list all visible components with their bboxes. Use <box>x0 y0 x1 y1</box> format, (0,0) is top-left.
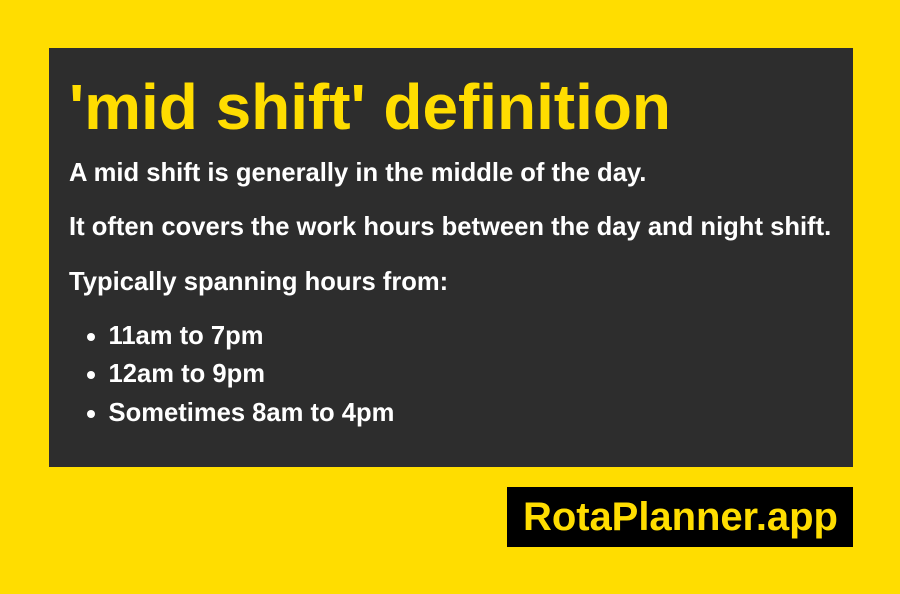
bullet marker 3 <box>87 410 95 418</box>
panel: definition <box>49 48 853 467</box>
text: coverage sentence: It often covers the work hours between the day and night shift. <box>69 213 831 241</box>
brand badge <box>507 487 853 547</box>
text: intro sentence: A mid shift is generally in the middle of the day. <box>69 159 646 187</box>
bullet marker 2 <box>87 371 95 379</box>
brand name: RotaPlanner.app <box>523 495 838 539</box>
list item 1: 11am to 7pm <box>108 322 264 350</box>
bullet marker 1 <box>87 333 95 341</box>
title: 'mid shift' definition <box>69 71 671 143</box>
text: list lead-in: Typically spanning hours from: <box>69 268 448 296</box>
list item 2: 12am to 9pm <box>108 360 265 388</box>
list item 3: Sometimes 8am to 4pm <box>108 399 394 427</box>
